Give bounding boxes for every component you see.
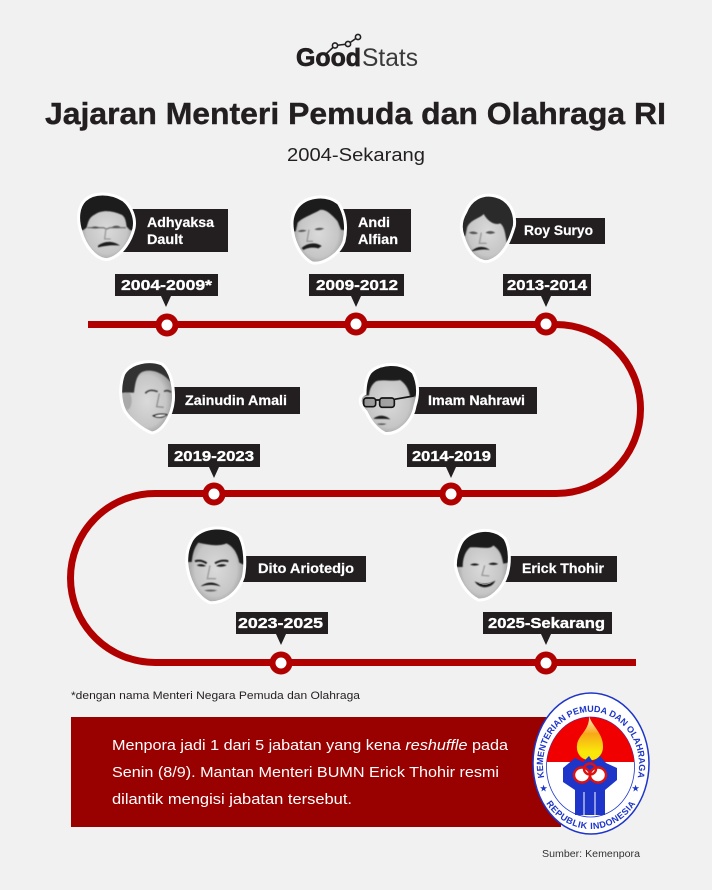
logo text: REPUBLIK INDONESIA xyxy=(546,800,636,829)
year label: 2023-2025 xyxy=(238,615,323,632)
name label xyxy=(496,556,617,582)
logo text: ★ xyxy=(632,784,640,793)
name label: Andi xyxy=(358,215,390,230)
year label: 2025-Sekarang xyxy=(488,615,605,632)
year label xyxy=(168,444,260,478)
portrait xyxy=(77,190,137,260)
timeline track xyxy=(71,324,641,662)
title: Jajaran Menteri Pemuda dan Olahraga RI xyxy=(45,96,666,131)
name label: Adhyaksa xyxy=(147,215,215,230)
logo: GoodStats: Good xyxy=(296,44,361,72)
year label: 2014-2019 xyxy=(412,448,491,465)
fist xyxy=(563,756,617,815)
name label: Imam Nahrawi xyxy=(428,393,525,408)
portrait xyxy=(183,522,248,603)
name label xyxy=(410,387,537,414)
minister: Erick Thohir xyxy=(453,524,617,645)
name label xyxy=(122,209,228,252)
minister: Imam Nahrawi xyxy=(360,359,537,478)
callout text: dilantik mengisi jabatan tersebut. xyxy=(112,791,352,808)
name label xyxy=(232,556,366,582)
minister: Roy Suryo xyxy=(457,189,605,307)
logo text: KEMENTERIAN PEMUDA DAN OLAHRAGA xyxy=(536,706,646,778)
footnote: *dengan nama Menteri Negara Pemuda dan Olahraga xyxy=(71,690,361,702)
year label: 2013-2014 xyxy=(507,277,588,294)
name label xyxy=(170,387,300,414)
name label xyxy=(336,209,411,252)
logo: Kementerian Pemuda dan Olahraga xyxy=(532,692,650,835)
name label: Dault xyxy=(147,232,184,247)
subtitle: 2004-Sekarang xyxy=(287,145,425,165)
name label: Zainudin Amali xyxy=(185,393,287,408)
year label: 2009-2012 xyxy=(316,277,398,294)
name label: Erick Thohir xyxy=(522,561,605,576)
flame xyxy=(577,716,603,760)
callout text xyxy=(112,737,509,808)
year label xyxy=(236,612,328,645)
minister: Andi Alfian xyxy=(290,191,411,307)
callout panel xyxy=(71,717,561,827)
minister: Zainudin Amali xyxy=(120,357,300,478)
name label: Alfian xyxy=(358,232,398,247)
timeline nodes xyxy=(158,316,554,672)
year label xyxy=(407,444,496,478)
portrait xyxy=(460,194,516,263)
logo text xyxy=(536,706,646,829)
portrait xyxy=(360,359,422,433)
year label xyxy=(483,612,612,645)
logo: GoodStats xyxy=(296,34,418,72)
year label: 2019-2023 xyxy=(174,448,254,465)
logo text: ★ xyxy=(540,784,548,793)
name label: Roy Suryo xyxy=(524,223,593,238)
name label: Dito Ariotedjo xyxy=(258,561,354,576)
source: Sumber: Kemenpora xyxy=(542,849,640,860)
year label xyxy=(503,274,591,307)
callout text: Senin (8/9). Mantan Menteri BUMN Erick Thohir resmi xyxy=(112,764,499,781)
year label: 2004-2009* xyxy=(121,277,212,294)
portrait xyxy=(453,524,513,600)
minister: Dito Ariotedjo xyxy=(183,522,366,645)
minister: Adhyaksa Dault xyxy=(77,190,228,307)
callout text: Menpora jadi 1 dari 5 jabatan yang kena reshuffle pada xyxy=(112,737,509,754)
name label xyxy=(498,218,605,244)
logo: GoodStats: Stats xyxy=(362,44,418,72)
portrait xyxy=(120,357,175,433)
year label xyxy=(115,274,218,307)
rings xyxy=(574,764,606,782)
portrait xyxy=(290,191,350,263)
